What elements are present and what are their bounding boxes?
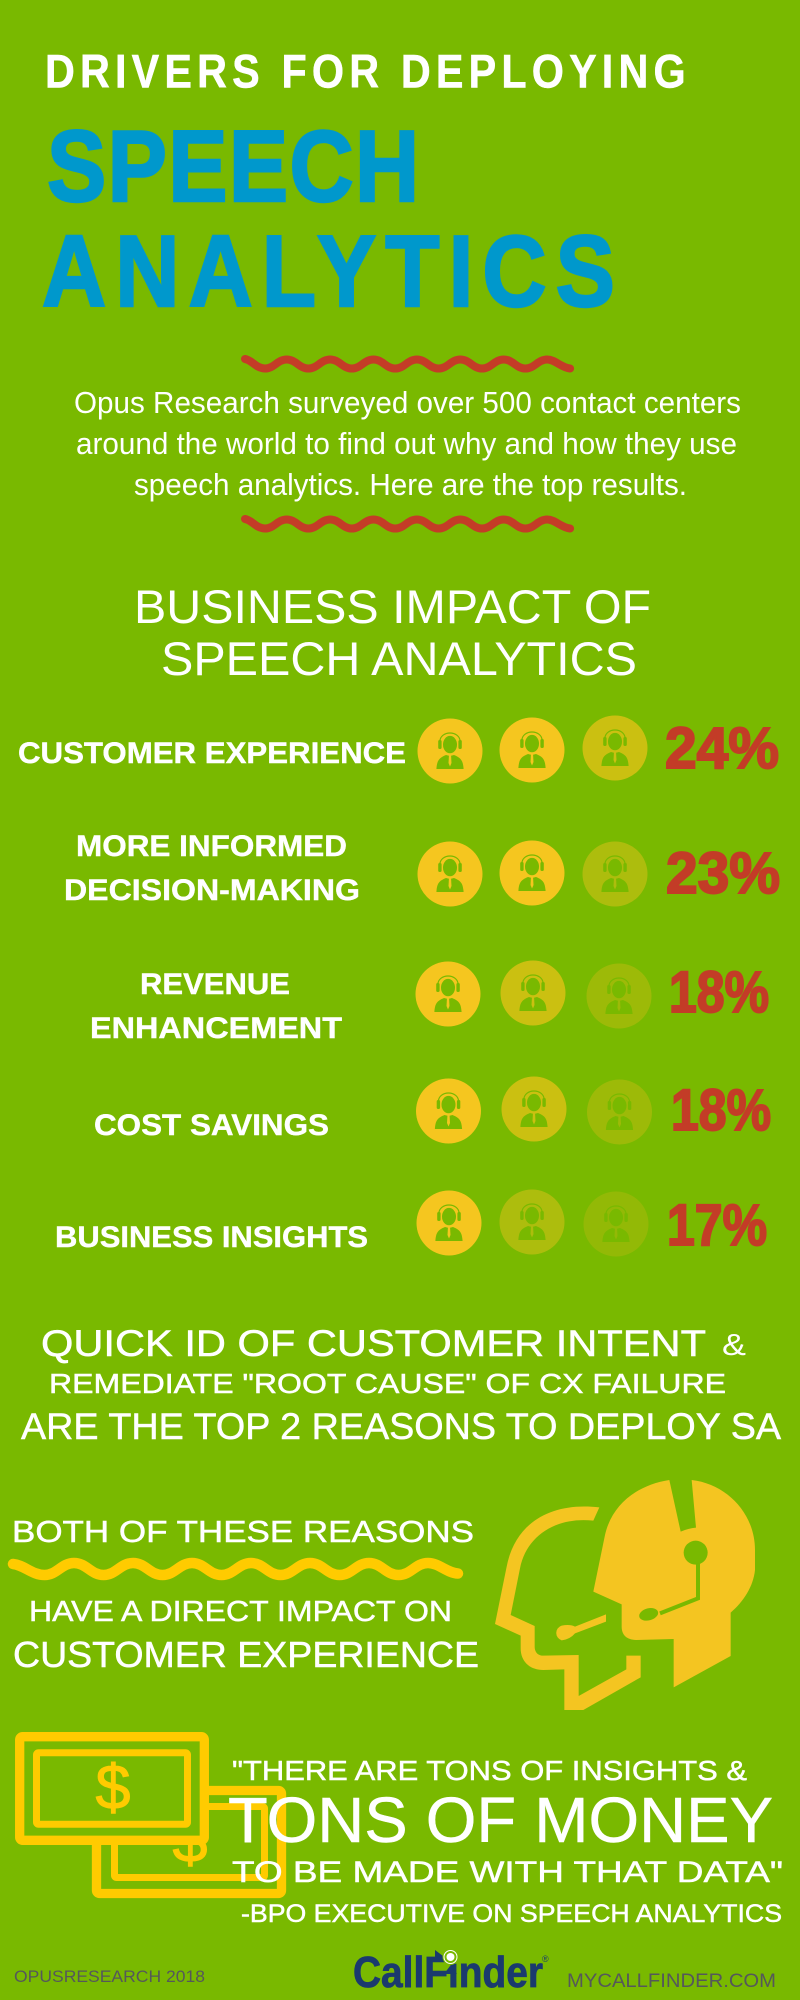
label: ENHANCEMENT: [90, 1012, 342, 1045]
text block: top 2 reasons: QUICK ID OF CUSTOMER INTENT: [41, 1323, 706, 1364]
logo target dot: [442, 1949, 458, 1965]
front bill: [20, 1737, 204, 1840]
title line: speech: SPEECH: [47, 111, 419, 223]
back microphone: [556, 1614, 606, 1640]
label: [90, 968, 342, 1045]
divider: yellow wave: [13, 1563, 458, 1575]
text block: top 2 reasons: REMEDIATE "ROOT CAUSE" OF CX FAILURE: [49, 1368, 726, 1399]
label: BUSINESS INSIGHTS: [55, 1221, 368, 1254]
headset ear piece: [684, 1541, 708, 1565]
heading: business impact: BUSINESS IMPACT OF: [134, 580, 651, 633]
label: CUSTOMER EXPERIENCE: [18, 737, 406, 770]
value: 17%: [667, 1193, 767, 1258]
value: 23%: [666, 841, 780, 906]
text: direct impact on customer experience: [13, 1596, 479, 1675]
website: MYCALLFINDER.COM: [567, 1971, 776, 1992]
divider: red wave top: [245, 359, 570, 368]
intro text: [74, 385, 741, 502]
icon: money bills: [20, 1737, 281, 1894]
text block: top 2 reasons: [21, 1323, 781, 1447]
logo: CallFinder: CallFinder: [353, 1948, 543, 1997]
icon: agent 2: [500, 960, 566, 1026]
title line: drivers for deploying: DRIVERS FOR DEPLOYING: [45, 46, 686, 98]
icon: agent 2: [500, 840, 564, 906]
text: both of these reasons: BOTH OF THESE REASONS: [12, 1514, 474, 1549]
icon: agent 3: [582, 716, 648, 780]
icon: agent 1: [416, 962, 480, 1026]
registered mark: ®: [542, 1954, 549, 1964]
label: REVENUE: [140, 968, 290, 1001]
title line: analytics: ANALYTICS: [42, 216, 615, 328]
icon: agent 1: [416, 1190, 482, 1256]
row: cost savings: [94, 1076, 771, 1144]
label: MORE INFORMED: [76, 830, 347, 863]
back head outline: [495, 1506, 641, 1710]
intro text: Opus Research surveyed over 500 contact centers: [74, 385, 741, 420]
icon: agent 2: [502, 1076, 566, 1142]
intro text: speech analytics. Here are the top results.: [134, 467, 687, 502]
title: [42, 46, 686, 328]
value: 18%: [671, 1078, 771, 1143]
icon: agent 3: [586, 964, 652, 1028]
headset boom and microphone: [660, 1563, 698, 1613]
quote: "THERE ARE TONS OF INSIGHTS &: [232, 1755, 747, 1786]
back dollar sign: $: [172, 1806, 208, 1876]
icon: agent 3: [587, 1080, 652, 1144]
text block: top 2 reasons: &: [722, 1327, 746, 1362]
icon: agent 1: [418, 718, 482, 784]
icon: two agent heads with headsets: [495, 1480, 755, 1710]
label: COST SAVINGS: [94, 1109, 329, 1142]
icon: agent 1: [418, 842, 482, 906]
text: direct impact on customer experience: CUSTOMER EXPERIENCE: [13, 1634, 479, 1675]
icon: agent 2: [500, 1190, 564, 1254]
value: 18%: [669, 960, 769, 1025]
back bill: [96, 1790, 282, 1894]
row: customer experience: [18, 716, 779, 784]
label: [64, 830, 360, 907]
quote: TO BE MADE WITH THAT DATA": [232, 1856, 783, 1889]
row: revenue enhancement: [90, 960, 769, 1045]
icon: agent 3: [582, 842, 648, 906]
front head: [593, 1480, 755, 1687]
source credit: OPUSRESEARCH 2018: [14, 1967, 205, 1986]
quote: -BPO EXECUTIVE ON SPEECH ANALYTICS: [241, 1900, 782, 1928]
intro text: around the world to find out why and how they use: [76, 426, 737, 461]
row: more informed decision-making: [64, 830, 780, 907]
heading: business impact: [134, 580, 651, 685]
text block: top 2 reasons: ARE THE TOP 2 REASONS TO DEPLOY SA: [21, 1406, 781, 1447]
icon: agent 1: [416, 1078, 481, 1144]
heading: business impact: SPEECH ANALYTICS: [161, 632, 637, 685]
icon: agent 2: [500, 718, 564, 782]
label: DECISION-MAKING: [64, 874, 360, 907]
quote: [228, 1755, 783, 1928]
quote: TONS OF MONEY: [228, 1784, 773, 1856]
value: 24%: [665, 716, 779, 781]
row: business insights: [55, 1190, 767, 1258]
divider: red wave bottom: [245, 519, 570, 528]
text: direct impact on customer experience: HAVE A DIRECT IMPACT ON: [29, 1596, 452, 1628]
front dollar sign: $: [95, 1753, 131, 1823]
logo arrow: [435, 1950, 457, 1974]
icon: agent 3: [584, 1192, 648, 1256]
